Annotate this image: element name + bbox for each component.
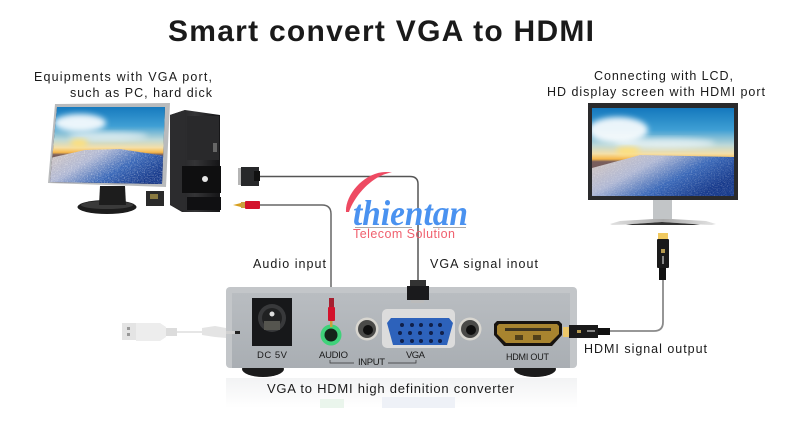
logo: thientan	[346, 172, 468, 241]
port labels: HDMI OUT	[506, 352, 550, 362]
VGA port	[382, 309, 455, 348]
right monitor	[588, 103, 738, 225]
logo wordmark: thientan	[353, 193, 468, 233]
left monitor	[48, 103, 170, 214]
monitor bezel	[48, 103, 170, 187]
monitor screen	[48, 106, 168, 186]
VGA plug in device	[407, 280, 429, 303]
source device label: Equipments with VGA port,	[34, 70, 212, 84]
monitor screen	[588, 108, 734, 196]
HDMI port	[494, 321, 562, 346]
DC power jack	[252, 298, 292, 346]
red audio plug	[328, 298, 335, 327]
monitor stand	[610, 200, 716, 225]
converter body	[226, 287, 577, 368]
port labels: DC 5V	[257, 350, 288, 361]
USB power cable	[122, 323, 240, 341]
audio cable	[260, 205, 331, 302]
converter feet	[242, 361, 556, 377]
port labels	[257, 350, 550, 368]
logo swoosh	[346, 172, 392, 212]
computer tower	[146, 110, 221, 212]
audio jack	[320, 324, 342, 346]
VGA plug	[238, 167, 260, 186]
monitor bezel	[588, 103, 738, 200]
RCA plug	[233, 201, 260, 209]
audio input label: Audio input	[253, 257, 327, 271]
source device label: such as PC, hard dick	[70, 86, 213, 100]
HDMI plug at display	[657, 233, 669, 280]
logo tagline: Telecom Solution	[353, 227, 455, 241]
VGA cable	[259, 176, 418, 284]
converter caption: VGA to HDMI high definition converter	[267, 381, 515, 396]
title: Smart convert VGA to HDMI	[168, 15, 594, 48]
port labels: INPUT	[358, 357, 385, 368]
right stereo jack	[458, 318, 482, 340]
HDMI plug at device	[563, 325, 610, 338]
device reflection	[226, 378, 577, 408]
left stereo jack	[356, 318, 378, 340]
port labels: AUDIO	[319, 350, 348, 361]
HDMI signal label: HDMI signal output	[584, 342, 708, 356]
port labels: VGA	[406, 350, 426, 361]
VGA signal label: VGA signal inout	[430, 257, 539, 271]
display label: Connecting with LCD,	[594, 69, 733, 83]
monitor stand	[78, 186, 136, 214]
source device label	[34, 70, 213, 100]
display label: HD display screen with HDMI port	[547, 85, 766, 99]
HDMI cable	[608, 278, 663, 331]
display label	[547, 69, 766, 99]
